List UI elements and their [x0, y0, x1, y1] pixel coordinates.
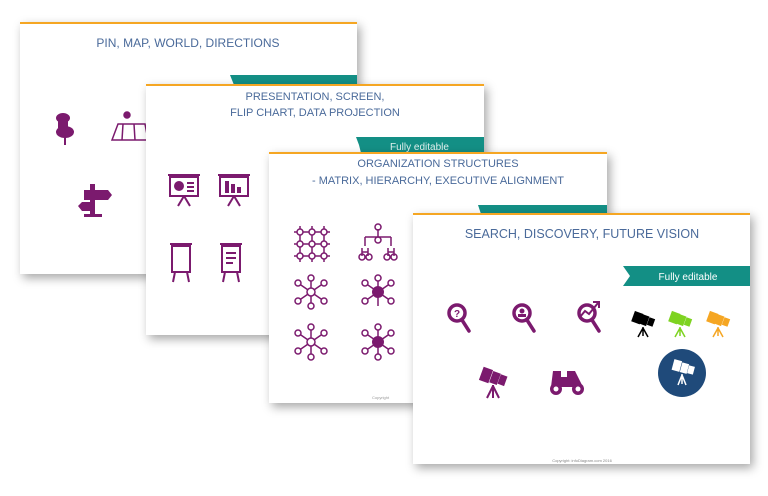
- icon: telescope in navy circle: [658, 349, 706, 397]
- slide 3: organization structures: [269, 152, 607, 403]
- icons: presentation boards: [168, 175, 250, 282]
- icon: pushpin: [56, 113, 74, 145]
- icon: purple telescope: [479, 367, 507, 398]
- slide 2 ribbon: [356, 137, 484, 153]
- slide 2: presentation screen: Fully editable: [390, 142, 449, 153]
- slide 1 ribbon: [230, 75, 357, 90]
- slide 2 title: PRESENTATION, SCREEN,: [246, 91, 384, 103]
- slide 1 title: PIN, MAP, WORLD, DIRECTIONS: [96, 36, 280, 50]
- icon: map: [112, 112, 148, 140]
- ribbon: fully editable: [623, 266, 750, 286]
- icons: magnifiers: [449, 305, 599, 331]
- slide 1: pin map world directions: [20, 22, 357, 274]
- ribbon: fully editable: Fully editable: [659, 272, 718, 283]
- slide 4 title: SEARCH, DISCOVERY, FUTURE VISION: [465, 227, 699, 241]
- slide 3: organization structures: Copyright: [372, 395, 390, 400]
- slide 3 title: ORGANIZATION STRUCTURES: [357, 158, 519, 170]
- slide 2: presentation screen: FLIP CHART, DATA PROJECTION: [230, 107, 400, 119]
- copyright: Copyright: infoDiagram.com 2016: [552, 458, 613, 463]
- icons: telescopes colored: [631, 311, 655, 337]
- slide 2: presentation screen: [146, 84, 484, 335]
- slide 4: search discovery future vision: ?: [454, 309, 460, 320]
- icon: signpost: [78, 184, 112, 217]
- icon: binoculars: [550, 371, 584, 395]
- icons: org structures: [294, 224, 397, 360]
- slide 4: search discovery future vision: [413, 213, 750, 464]
- slide 3 ribbon: [478, 205, 607, 220]
- slide 3: organization structures: - MATRIX, HIERARCHY, EXECUTIVE ALIGNMENT: [312, 175, 564, 187]
